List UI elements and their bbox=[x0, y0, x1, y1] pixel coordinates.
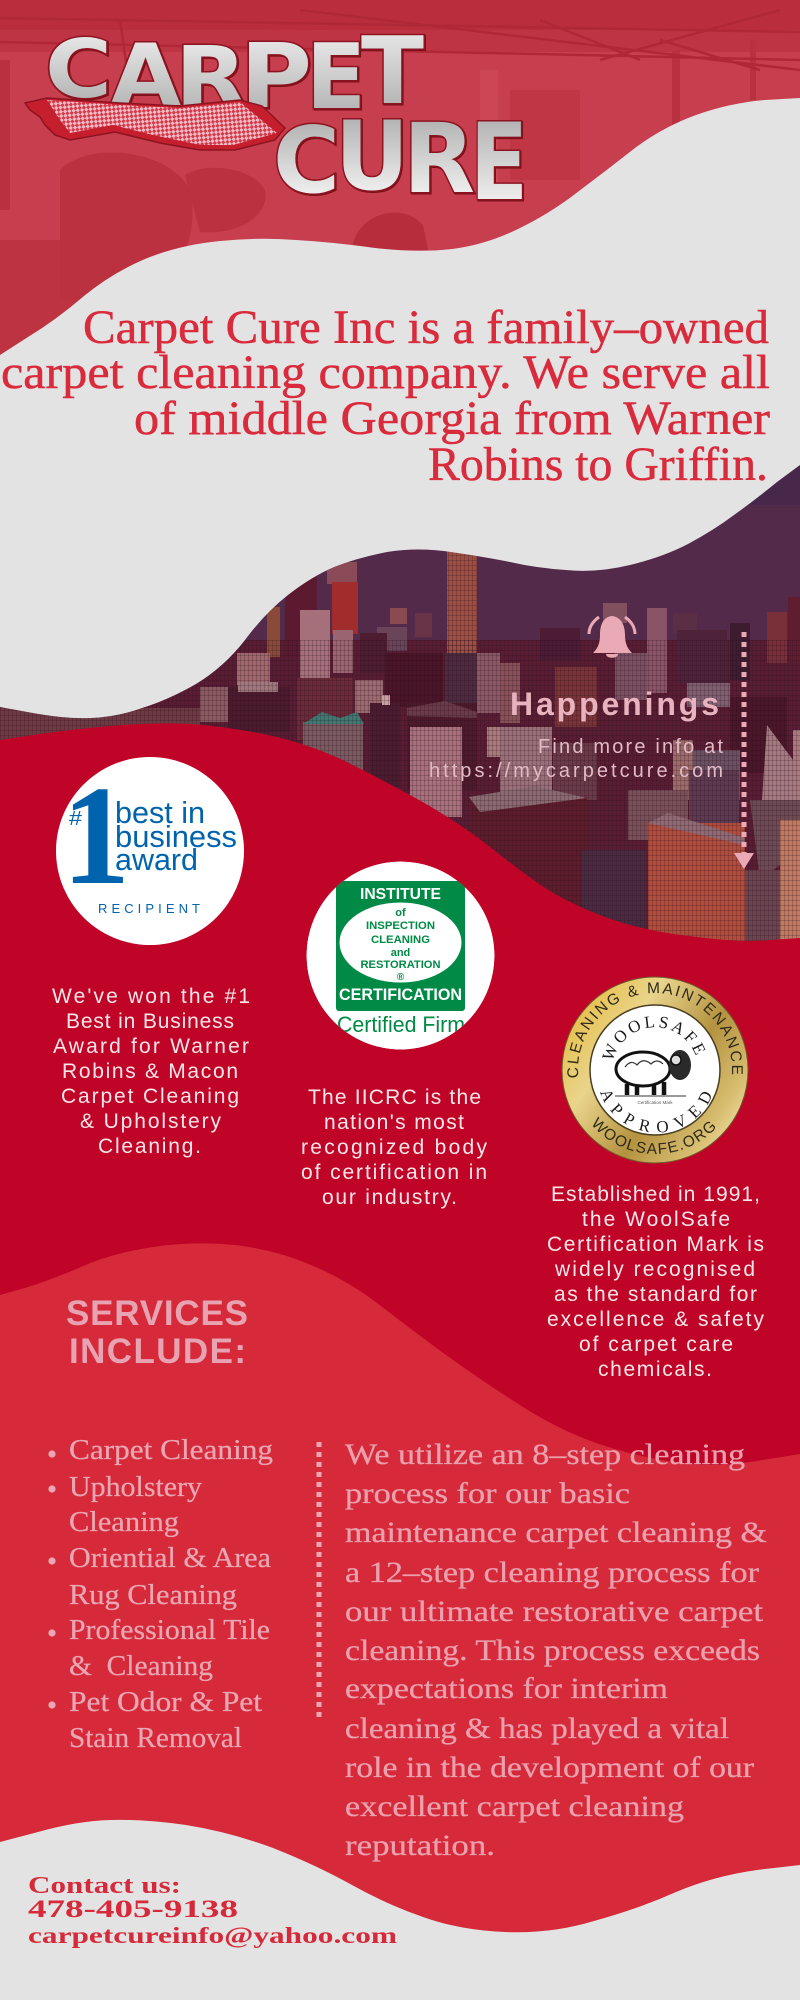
badge: IICRC: CERTIFICATION bbox=[339, 985, 462, 1004]
bottom grey wave bbox=[0, 1820, 800, 2000]
process paragraph: process for our basic bbox=[345, 1477, 630, 1510]
logo: Carpet lettering: P bbox=[240, 24, 312, 128]
happenings heading: Happenings bbox=[510, 686, 719, 722]
badge: best in business: award bbox=[115, 842, 198, 877]
dark red awards panel bbox=[0, 723, 800, 1500]
grey wave panel: intro bbox=[0, 98, 800, 718]
dotted divider bbox=[316, 1442, 322, 1718]
badge: best in business bbox=[56, 756, 244, 945]
process paragraph bbox=[345, 1438, 767, 1862]
caption: WoolSafe: the WoolSafe bbox=[582, 1208, 730, 1231]
services list: Stain Removal bbox=[69, 1723, 242, 1754]
badge: IICRC: and bbox=[391, 947, 410, 959]
logo: Carpet lettering bbox=[45, 17, 424, 130]
caption: IICRC: nation's most bbox=[324, 1111, 464, 1134]
process paragraph: cleaning & has played a vital bbox=[345, 1712, 729, 1745]
logo: Cure lettering: R bbox=[403, 103, 475, 215]
caption: IICRC: our industry. bbox=[322, 1186, 457, 1209]
logo: Carpet lettering: C bbox=[45, 23, 112, 116]
services list: Professional Tile bbox=[69, 1615, 270, 1646]
caption: IICRC: recognized body bbox=[301, 1136, 488, 1159]
caption: IICRC: The IICRC is the bbox=[308, 1086, 481, 1109]
caption: best in business: Award for Warner bbox=[53, 1035, 249, 1058]
intro heading: Carpet Cure Inc is a family–owned bbox=[83, 301, 769, 354]
badge: IICRC: of bbox=[395, 907, 406, 919]
badge: IICRC: RESTORATION bbox=[360, 959, 441, 971]
contact block: 478-405-9138 bbox=[28, 1896, 238, 1923]
contact block bbox=[28, 1873, 397, 1949]
caption: WoolSafe: Certification Mark is bbox=[547, 1233, 764, 1256]
caption: best in business: Carpet Cleaning bbox=[61, 1085, 239, 1108]
caption: best in business bbox=[52, 985, 250, 1158]
services list bbox=[48, 1435, 273, 1754]
intro heading bbox=[1, 301, 770, 491]
caption: WoolSafe: widely recognised bbox=[554, 1258, 755, 1281]
intro heading: of middle Georgia from Warner bbox=[134, 392, 770, 445]
intro heading: Robins to Griffin. bbox=[428, 438, 768, 491]
caption: WoolSafe: Established in 1991, bbox=[551, 1183, 760, 1206]
process paragraph: reputation. bbox=[345, 1829, 495, 1862]
caption: WoolSafe: of carpet care bbox=[579, 1333, 733, 1356]
logo: Carpet lettering: T bbox=[361, 17, 424, 125]
heading: services include: INCLUDE: bbox=[69, 1332, 246, 1371]
logo: Cure lettering: U bbox=[335, 102, 409, 212]
services list: Carpet Cleaning bbox=[69, 1435, 273, 1466]
caption: best in business: Cleaning. bbox=[98, 1135, 201, 1158]
badge: best in business: business bbox=[115, 819, 237, 854]
arrow: dotted down bbox=[734, 632, 754, 869]
badge: IICRC: ® bbox=[397, 972, 405, 983]
caption: WoolSafe: excellence & safety bbox=[547, 1308, 764, 1331]
badge: WoolSafe: APPROVED bbox=[600, 1092, 711, 1132]
process paragraph: role in the development of our bbox=[345, 1751, 754, 1784]
badge: IICRC: CLEANING bbox=[371, 934, 430, 946]
photo: warehouse tinted red bbox=[0, 0, 800, 365]
caption: WoolSafe: chemicals. bbox=[598, 1358, 712, 1381]
services list: Pet Odor & Pet bbox=[69, 1687, 262, 1718]
happenings link text: https://mycarpetcure.com bbox=[429, 760, 723, 782]
services list: & Cleaning bbox=[69, 1651, 213, 1682]
heading: services include: SERVICES bbox=[66, 1294, 248, 1333]
badge: IICRC: INSPECTION bbox=[366, 920, 435, 932]
process paragraph: We utilize an 8–step cleaning bbox=[345, 1438, 745, 1471]
light red services panel bbox=[0, 1243, 800, 2000]
process paragraph: excellent carpet cleaning bbox=[345, 1790, 684, 1823]
process paragraph: expectations for interim bbox=[345, 1672, 668, 1705]
caption: best in business: Robins & Macon bbox=[62, 1060, 238, 1083]
process paragraph: maintenance carpet cleaning & bbox=[345, 1516, 767, 1549]
logo: Carpet lettering: A bbox=[110, 26, 181, 126]
happenings link text bbox=[429, 736, 723, 782]
services list: Rug Cleaning bbox=[69, 1580, 237, 1611]
icon: bell bbox=[589, 616, 635, 658]
caption: WoolSafe: as the standard for bbox=[554, 1283, 757, 1306]
badge: WoolSafe: WOOLSAFE.ORG bbox=[592, 1116, 716, 1154]
badge: IICRC: Certified Firm bbox=[337, 1012, 465, 1037]
process paragraph: our ultimate restorative carpet bbox=[345, 1595, 764, 1628]
badge: best in business: RECIPIENT bbox=[98, 901, 200, 916]
badge: WoolSafe: WOOLSAFE bbox=[602, 1016, 706, 1058]
contact block: Contact us: bbox=[28, 1873, 181, 1899]
badge: WoolSafe: CLEANING & MAINTENANCE bbox=[567, 982, 743, 1078]
process paragraph: a 12–step cleaning process for bbox=[345, 1556, 759, 1589]
caption: IICRC: of certification in bbox=[301, 1161, 487, 1184]
logo: Cure lettering bbox=[273, 101, 528, 224]
logo: Carpet lettering: E bbox=[306, 25, 366, 130]
contact block: carpetcureinfo@yahoo.com bbox=[28, 1923, 397, 1949]
caption: best in business: & Upholstery bbox=[80, 1110, 222, 1133]
heading: services include bbox=[66, 1294, 248, 1371]
process paragraph: cleaning. This process exceeds bbox=[345, 1634, 760, 1667]
badge: IICRC bbox=[306, 862, 494, 1050]
photo: city skyline tinted plum bbox=[0, 455, 800, 950]
caption: best in business: Best in Business bbox=[66, 1010, 234, 1033]
services list: Cleaning bbox=[69, 1507, 179, 1538]
badge: best in business: # bbox=[69, 808, 83, 830]
logo: Cure lettering: E bbox=[470, 101, 528, 224]
badge: best in business: best in bbox=[115, 795, 205, 830]
icon: sheep bbox=[615, 1050, 691, 1105]
caption: best in business: We've won the #1 bbox=[52, 985, 250, 1008]
intro heading: carpet cleaning company. We serve all bbox=[1, 346, 770, 399]
badge: WoolSafe bbox=[562, 976, 748, 1164]
badge: IICRC: INSTITUTE bbox=[360, 886, 441, 903]
badge: best in business: 1 bbox=[62, 756, 130, 914]
caption: IICRC bbox=[301, 1086, 488, 1209]
logo: Cure lettering: C bbox=[273, 107, 340, 214]
happenings link text: Find more info at bbox=[538, 736, 723, 758]
logo: Carpet lettering: R bbox=[175, 29, 247, 128]
caption: WoolSafe bbox=[547, 1183, 764, 1381]
services list: Oriential & Area bbox=[69, 1543, 272, 1574]
services list: Upholstery bbox=[69, 1472, 202, 1503]
logo: carpet swatch bbox=[25, 98, 285, 150]
icon: sheep: Certification Mark bbox=[637, 1100, 673, 1105]
